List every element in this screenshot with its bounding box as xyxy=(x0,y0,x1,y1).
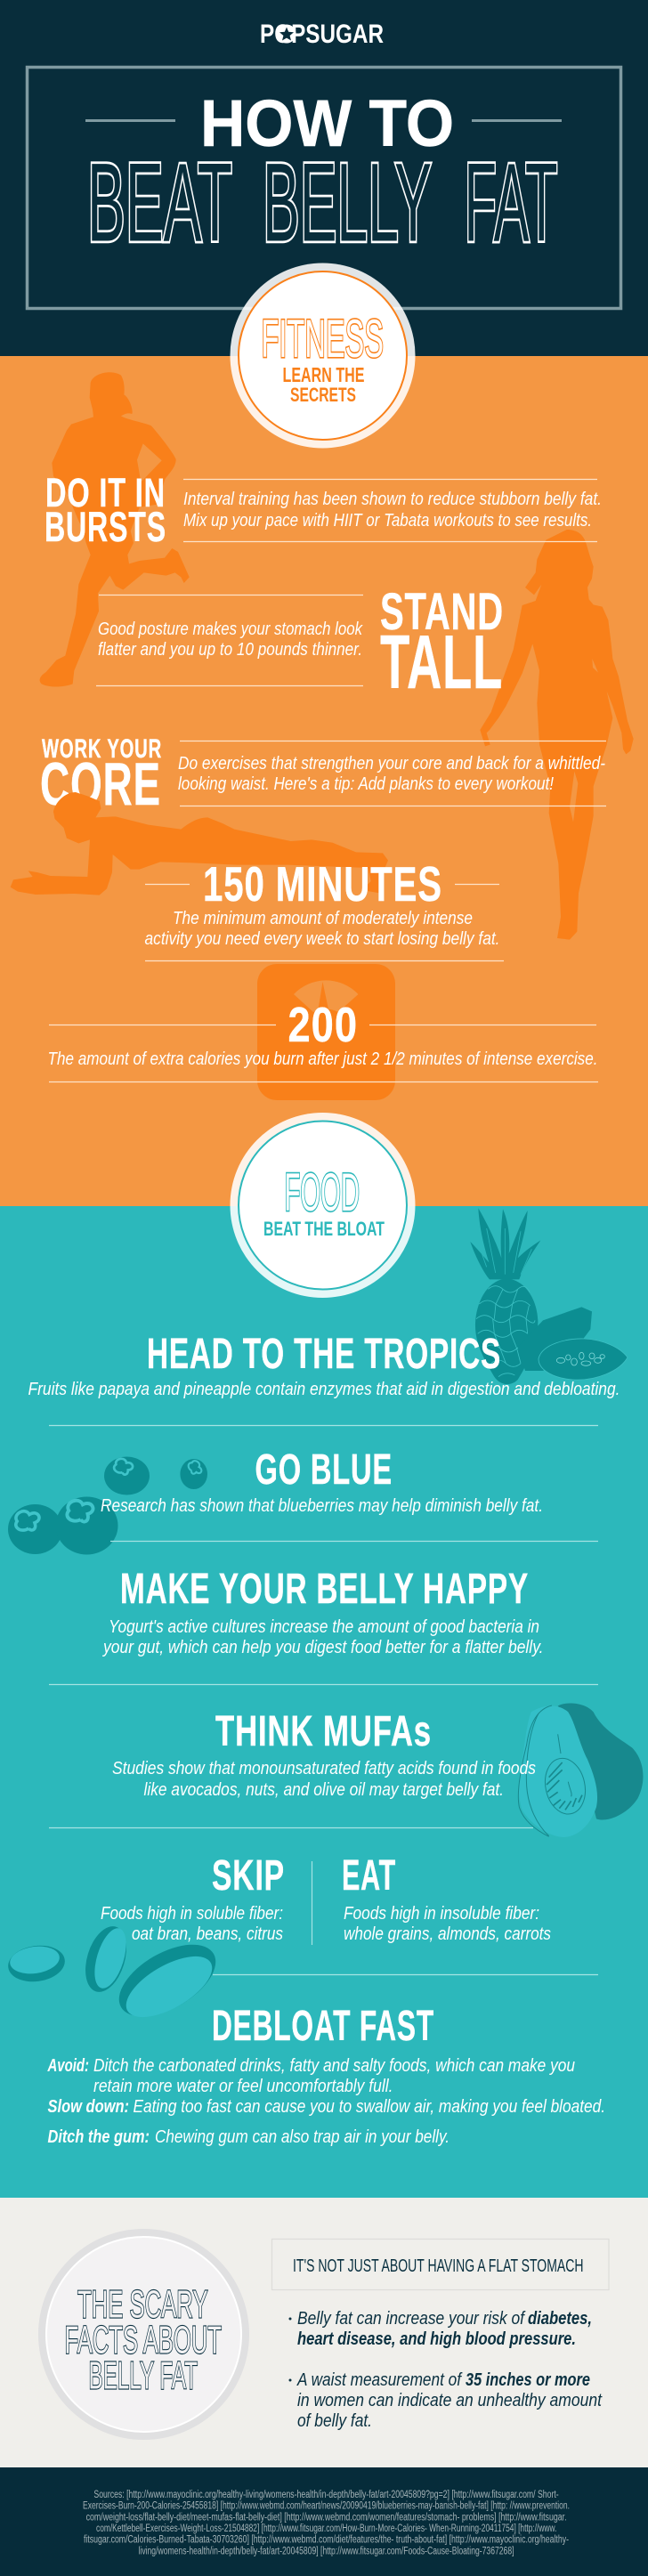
make your belly happy xyxy=(49,1566,598,1684)
fact: diabetes xyxy=(288,2309,592,2349)
debloat fast: Avoid: xyxy=(47,2056,89,2076)
title: beat belly fat: BELLY xyxy=(263,141,432,265)
panel: header xyxy=(0,0,648,356)
stat: 200 xyxy=(48,997,598,1082)
debloat fast: Ditch the carbonated drinks, fatty and salty foods, which can make you xyxy=(93,2056,575,2076)
badge: food xyxy=(230,1113,415,1298)
badge: fitness: FITNESS xyxy=(262,309,384,369)
work your core: WORK YOUR xyxy=(42,734,162,764)
go blue: GO BLUE xyxy=(255,1446,393,1494)
skip and eat: SKIP xyxy=(212,1852,285,1900)
badge: scary facts xyxy=(38,2229,249,2440)
skip and eat: EAT xyxy=(342,1852,396,1900)
skip and eat: Foods high in soluble fiber: xyxy=(101,1904,283,1924)
fact: waist: A waist measurement of xyxy=(296,2370,463,2390)
debloat fast xyxy=(47,2003,605,2147)
debloat fast: DEBLOAT FAST xyxy=(212,2003,434,2050)
stat: 150 minutes: activity you need every week to start losing belly fat. xyxy=(144,929,500,949)
panel: fitness xyxy=(0,356,648,1206)
debloat fast: Chewing gum can also trap air in your belly. xyxy=(155,2127,450,2147)
logo: POPSUGAR: POPSUGAR xyxy=(260,20,384,49)
fact: diabetes: diabetes, xyxy=(528,2309,592,2329)
stat: 150 minutes: 150 MINUTES xyxy=(203,856,442,911)
badge: food: FOOD xyxy=(285,1162,360,1222)
head to the tropics xyxy=(28,1331,620,1426)
do it in bursts: DO IT IN xyxy=(45,470,166,515)
stand tall: Good posture makes your stomach look xyxy=(98,620,363,639)
debloat fast: retain more water or feel uncomfortably full. xyxy=(93,2077,393,2096)
icon: almonds xyxy=(6,1922,227,2031)
stand tall: STAND xyxy=(380,583,504,641)
fact: diabetes: heart disease, and high blood pressure. xyxy=(297,2329,576,2349)
do it in bursts: BURSTS xyxy=(45,503,166,550)
badge: fitness: LEARN THE xyxy=(283,363,365,386)
skip and eat: whole grains, almonds, carrots xyxy=(344,1924,551,1944)
think mufas xyxy=(49,1708,536,1828)
stat: 200: 200 xyxy=(288,997,358,1052)
heading: core: CORE xyxy=(40,750,161,818)
icon: bathroom scale xyxy=(257,964,395,1100)
title frame xyxy=(27,68,621,308)
skip and eat: Foods high in insoluble fiber: xyxy=(344,1904,539,1924)
go blue: Research has shown that blueberries may help diminish belly fat. xyxy=(101,1496,543,1516)
make your belly happy: Yogurt's active cultures increase the amount of good bacteria in xyxy=(109,1617,539,1637)
badge: food: BEAT THE BLOAT xyxy=(263,1218,385,1240)
stand tall xyxy=(96,583,504,705)
badge: scary facts: THE SCARY xyxy=(77,2282,208,2327)
debloat fast: Ditch the gum: xyxy=(48,2127,150,2147)
stand tall: TALL xyxy=(380,620,503,705)
debloat fast: Slow down: xyxy=(48,2097,129,2117)
panel: sources footer xyxy=(0,2467,648,2576)
go blue xyxy=(101,1446,598,1542)
badge: fitness: SECRETS xyxy=(290,384,356,406)
title: how to: HOW TO xyxy=(200,86,454,160)
icon: blueberries xyxy=(8,1456,207,1554)
callout box xyxy=(272,2240,609,2289)
head to the tropics: HEAD TO THE TROPICS xyxy=(147,1331,501,1378)
fact: diabetes: Belly fat can increase your risk of xyxy=(297,2309,526,2329)
skip and eat: oat bran, beans, citrus xyxy=(132,1924,283,1944)
silhouette: plank xyxy=(11,792,388,895)
fact: waist: 35 inches or more xyxy=(466,2370,590,2390)
fact: waist: of belly fat. xyxy=(297,2411,372,2431)
panel: scary facts xyxy=(0,2198,648,2467)
panel: sources footer: living/womens-health/in-depth/belly-fat/art-20045809] [http://www.fitsugar.com/Foods-Cause-Bloating-7367268] xyxy=(139,2546,514,2556)
skip and eat xyxy=(101,1852,598,1974)
badge: fitness xyxy=(230,263,415,449)
work your core xyxy=(42,734,606,806)
do it in bursts xyxy=(45,470,602,550)
stand tall: flatter and you up to 10 pounds thinner. xyxy=(98,640,362,660)
think mufas: Studies show that monounsaturated fatty acids found in foods xyxy=(112,1759,536,1778)
icon: pineapple and papaya xyxy=(470,1208,628,1384)
plank head overlapping core xyxy=(53,792,101,843)
stat: 150 minutes: The minimum amount of moderately intense xyxy=(173,909,473,928)
badge: scary facts: BELLY FAT xyxy=(89,2353,198,2398)
badge: scary facts: FACTS ABOUT xyxy=(64,2318,222,2362)
work your core: looking waist. Here's a tip: Add planks to every workout! xyxy=(178,774,554,794)
panel: food xyxy=(0,1206,648,2198)
silhouette: runner xyxy=(40,372,190,686)
title: beat belly fat: BEAT xyxy=(87,141,232,265)
make your belly happy: your gut, which can help you digest food better for a flatter belly. xyxy=(101,1638,543,1657)
silhouette: standing woman xyxy=(480,530,634,940)
fact: waist xyxy=(288,2370,603,2431)
icon: avocado xyxy=(518,1703,643,1837)
fact: waist: in women can indicate an unhealthy amount xyxy=(297,2391,603,2410)
title: beat belly fat xyxy=(87,141,557,265)
stat: 150 minutes xyxy=(144,856,504,961)
think mufas: like avocados, nuts, and olive oil may target belly fat. xyxy=(144,1780,504,1800)
think mufas: THINK MUFAs xyxy=(215,1708,432,1755)
title: how to xyxy=(85,86,562,160)
